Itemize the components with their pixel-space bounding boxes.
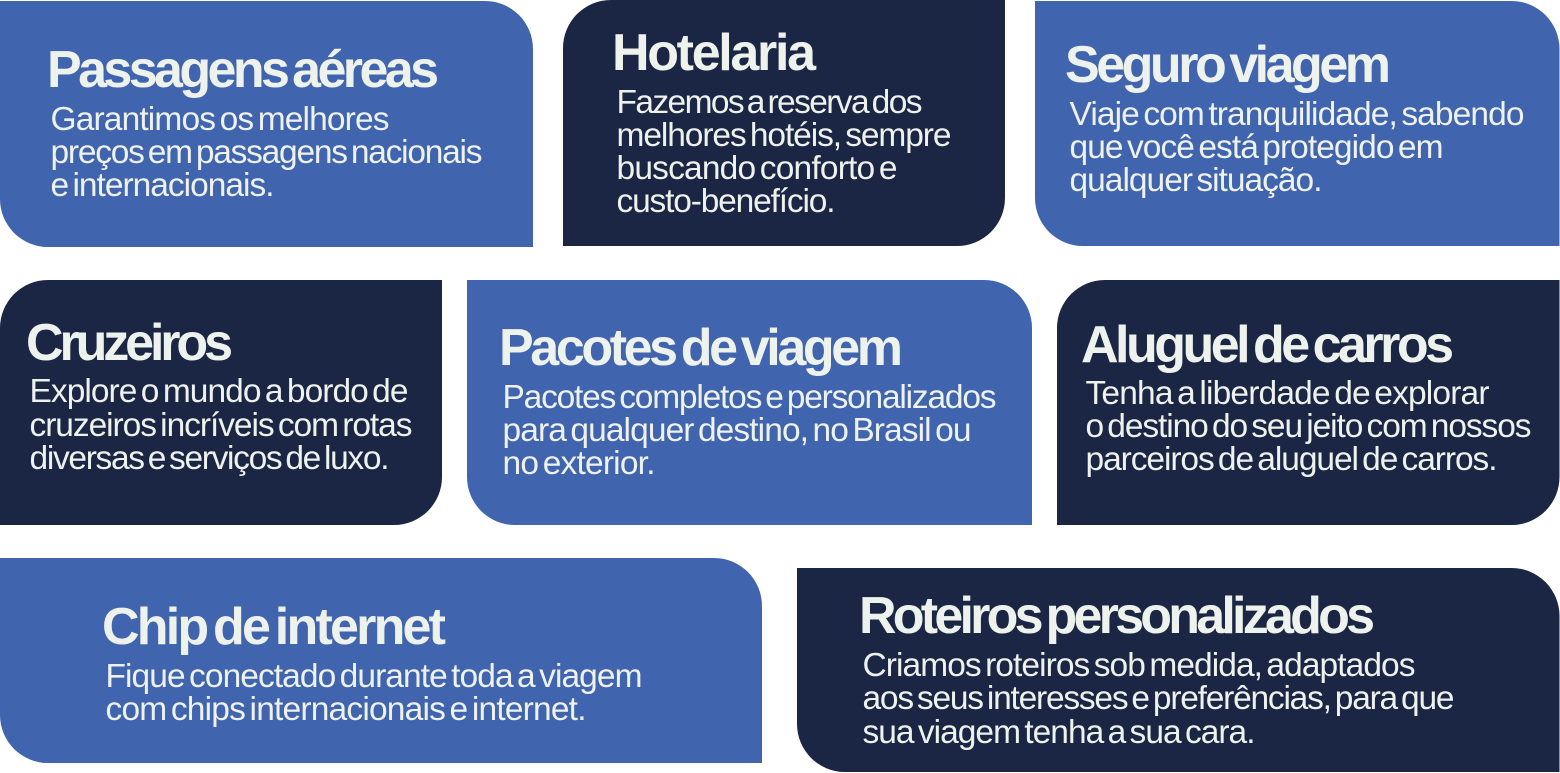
panel: Aluguel de carros <box>1057 280 1560 525</box>
text block: Chip de internet description <box>106 658 642 728</box>
text block: Chip de internet description: com chips internacionais e internet. <box>106 691 586 728</box>
text block: Hotelaria description: custo-benefício. <box>616 183 836 220</box>
panel: Cruzeiros <box>0 280 442 525</box>
text block: Hotelaria description <box>616 84 952 220</box>
heading: Aluguel de carros: Aluguel de carros <box>1081 316 1454 374</box>
text block: Seguro viagem description <box>1070 96 1524 199</box>
text block: Chip de internet description: Fique conectado durante toda a viagem <box>106 658 642 695</box>
text block: Pacotes de viagem description: Pacotes completos e personalizados <box>502 379 996 416</box>
text block: Hotelaria description: buscando conforto e <box>616 150 898 187</box>
panel: Pacotes de viagem <box>467 280 1032 525</box>
text block: Aluguel de carros description: parceiros de aluguel de carros. <box>1086 441 1498 478</box>
panel: Hotelaria <box>563 0 1005 246</box>
text block: Hotelaria description: Fazemos a reserva dos <box>616 84 922 121</box>
text block: Passagens aéreas description: Garantimos os melhores <box>50 101 390 138</box>
heading: Cruzeiros: Cruzeiros <box>26 314 233 372</box>
heading: Passagens aéreas: Passagens aéreas <box>47 41 439 99</box>
text block: Aluguel de carros description: Tenha a liberdade de explorar <box>1086 375 1490 412</box>
heading: Seguro viagem: Seguro viagem <box>1065 36 1391 94</box>
text block: Passagens aéreas description: e internacionais. <box>50 167 274 204</box>
text block: Aluguel de carros description: o destino do seu jeito com nossos <box>1086 408 1532 445</box>
heading: Roteiros personalizados: Roteiros personalizados <box>859 587 1375 645</box>
text block: Seguro viagem description: qualquer situação. <box>1070 162 1322 199</box>
panel: Seguro viagem <box>1035 1 1560 246</box>
text block: Roteiros personalizados description: aos seus interesses e preferências, para que <box>862 680 1454 717</box>
text block: Cruzeiros description: diversas e serviços de luxo. <box>30 440 390 477</box>
heading: Hotelaria: Hotelaria <box>612 24 817 82</box>
text block: Cruzeiros description: Explore o mundo a bordo de <box>30 373 408 410</box>
text block: Cruzeiros description <box>30 373 412 477</box>
panel: Chip de internet <box>0 558 762 763</box>
text block: Roteiros personalizados description <box>862 647 1454 751</box>
text block: Hotelaria description: melhores hotéis, sempre <box>616 117 952 154</box>
text block: Passagens aéreas description: preços em passagens nacionais <box>50 134 482 171</box>
text block: Seguro viagem description: que você está protegido em <box>1070 129 1444 166</box>
text block: Pacotes de viagem description <box>502 379 996 482</box>
text block: Roteiros personalizados description: sua viagem tenha a sua cara. <box>862 714 1256 751</box>
text block: Cruzeiros description: cruzeiros incríveis com rotas <box>30 407 412 444</box>
panel: Roteiros personalizados <box>797 568 1560 772</box>
panel: Passagens aéreas <box>0 1 533 247</box>
text block: Aluguel de carros description <box>1086 375 1532 478</box>
text block: Seguro viagem description: Viaje com tranquilidade, sabendo <box>1070 96 1524 133</box>
text block: Pacotes de viagem description: para qualquer destino, no Brasil ou <box>502 412 972 449</box>
text block: Passagens aéreas description <box>50 101 482 204</box>
text block: Pacotes de viagem description: no exterior. <box>502 445 656 482</box>
heading: Pacotes de viagem: Pacotes de viagem <box>499 319 903 377</box>
text block: Roteiros personalizados description: Criamos roteiros sob medida, adaptados <box>862 647 1416 684</box>
heading: Chip de internet: Chip de internet <box>102 598 446 656</box>
